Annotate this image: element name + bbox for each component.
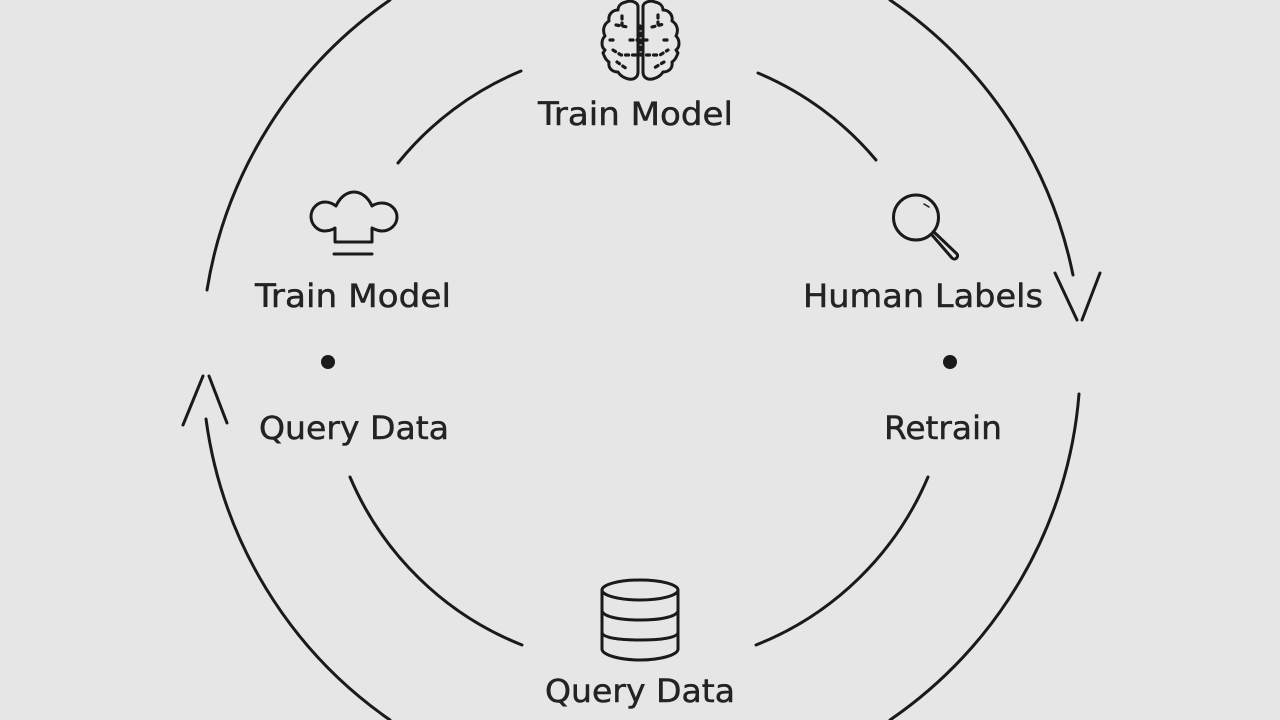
label: Query Data bottom: Query Data bbox=[545, 672, 735, 710]
arrowhead: right bbox=[1055, 273, 1100, 320]
outer arc: top right with arrow bbox=[890, 0, 1073, 275]
label: Train Model top: Train Model bbox=[537, 95, 733, 133]
label: Retrain: Retrain bbox=[884, 409, 1002, 447]
outer arc: bottom left with arrow bbox=[206, 419, 390, 720]
label: Human Labels: Human Labels bbox=[803, 277, 1043, 315]
icon: magnifying glass bbox=[894, 195, 958, 259]
inner arc: bottom right bbox=[756, 477, 928, 645]
inner arc: top right bbox=[758, 73, 876, 160]
outer arc: top left bbox=[207, 0, 390, 290]
icon: brain bbox=[602, 1, 679, 79]
dot: right bbox=[943, 355, 957, 369]
inner arc: bottom left bbox=[350, 477, 522, 645]
icon: database bbox=[602, 580, 678, 660]
arrowhead: left bbox=[183, 376, 227, 425]
inner arc: top left bbox=[398, 71, 521, 163]
outer arc: bottom right bbox=[890, 394, 1079, 720]
label: Train Model left: Train Model bbox=[254, 277, 451, 315]
icon: chef hat bbox=[311, 192, 397, 254]
dot: left bbox=[321, 355, 335, 369]
label: Query Data left: Query Data bbox=[259, 409, 449, 447]
